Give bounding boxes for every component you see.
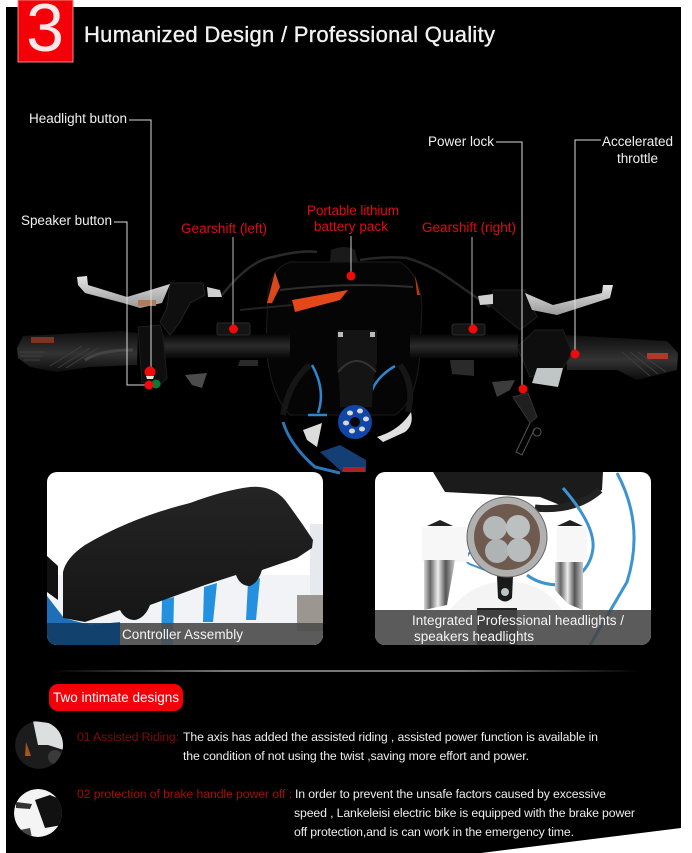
callout: speaker button: Speaker button [21, 213, 112, 228]
callout: accelerated throttle: Accelerated [602, 134, 673, 149]
item 01 text [77, 730, 598, 763]
item 02 text: speed , Lankeleisi electric bike is equipped with the brake power [294, 806, 635, 820]
item 02 thumbnail [14, 789, 62, 838]
callout: gearshift right [422, 220, 516, 334]
item 02 text: In order to prevent the unsafe factors caused by excessive [295, 787, 606, 801]
right grip [565, 335, 678, 380]
item 01 text: the condition of not using the twist ,saving more effort and power. [183, 749, 529, 763]
left brake lever [77, 276, 170, 308]
callout: accelerated throttle: throttle [617, 151, 658, 166]
callout: speaker button [21, 213, 160, 390]
left grip [17, 331, 138, 372]
caption bar [120, 623, 323, 645]
white fork caps [303, 423, 322, 447]
lower blue frame [283, 422, 340, 473]
handlebar right [410, 334, 518, 358]
section heading pill: Two intimate designs [53, 690, 179, 705]
callout: portable lithium battery pack: Portable lithium [307, 203, 399, 218]
number badge [18, 0, 73, 66]
item 01 thumbnail [15, 721, 64, 769]
key [513, 393, 537, 423]
photo panel: headlights: Integrated Professional headlights / [412, 613, 624, 628]
brake cables [222, 252, 317, 295]
item 02 text: 02 protection of brake handle power off : [77, 787, 292, 801]
photo panel: headlights [375, 472, 651, 645]
battery pack bag [266, 262, 422, 415]
blue hub [338, 405, 372, 439]
item 01 text: 01 Assisted Riding: [77, 730, 179, 744]
blue cables [312, 365, 321, 413]
photo panel: headlights: speakers headlights [414, 629, 534, 644]
item 02 text [77, 787, 635, 839]
callout: power lock: Power lock [428, 134, 494, 149]
section heading pill [49, 684, 183, 711]
item 01 text: The axis has added the assisted riding , assisted power function is available in [183, 730, 598, 744]
left switch housing [138, 325, 167, 388]
callout: gearshift right: Gearshift (right) [422, 220, 516, 235]
headlight lamp [467, 497, 547, 577]
right brake lever [525, 285, 613, 315]
callout: portable lithium battery pack: battery pack [314, 219, 388, 234]
photo panel: controller assembly [47, 472, 323, 645]
divider [50, 670, 640, 672]
clamp details [238, 360, 474, 376]
right switch housing [517, 330, 572, 377]
callout: gearshift left [181, 221, 267, 334]
title: Humanized Design / Professional Quality [84, 22, 495, 47]
handlebar left [163, 334, 290, 358]
stem [337, 330, 377, 407]
controller cover [63, 487, 313, 622]
callout: portable lithium battery pack [307, 203, 399, 280]
callout: headlight button [29, 111, 156, 379]
callout: accelerated throttle [570, 134, 673, 358]
callout: power lock [428, 134, 528, 394]
callout: headlight button: Headlight button [29, 111, 127, 126]
handlebar photo [17, 247, 678, 473]
caption bar [375, 610, 651, 645]
callout: gearshift left: Gearshift (left) [181, 221, 267, 236]
photo panel: controller assembly: Controller Assembly [122, 627, 243, 642]
item 02 text: off protection,and is can work in the emergency time. [294, 825, 574, 839]
